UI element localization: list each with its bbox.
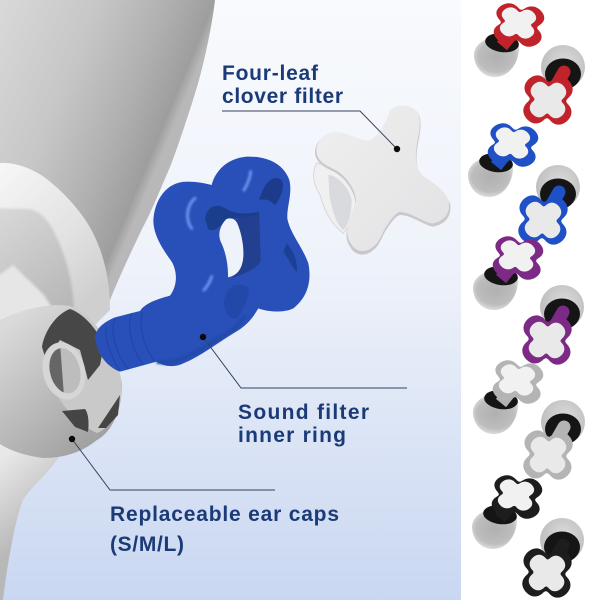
back face <box>314 163 367 233</box>
leader dot <box>200 334 206 340</box>
white four-leaf clover filter <box>314 105 450 255</box>
label: sound filter inner ring <box>200 334 407 447</box>
bottom pocket <box>223 285 249 319</box>
purple earplug A <box>473 225 558 310</box>
dark pocket top right <box>259 178 283 205</box>
cap dark interior <box>42 309 104 380</box>
opening through ring <box>219 218 243 277</box>
black earplug A <box>472 464 557 549</box>
inner ear fold <box>0 265 60 340</box>
inner tube <box>42 342 86 400</box>
sound filter inner ring (blue) <box>95 157 310 372</box>
lower dark blobs <box>62 395 120 432</box>
leader dot <box>394 146 400 152</box>
dark pocket upper-left <box>205 206 259 230</box>
black earplug B <box>507 518 587 600</box>
front edge <box>315 106 450 255</box>
red earplug B <box>508 45 588 140</box>
cheek below ear <box>0 440 60 600</box>
cap body <box>0 305 122 458</box>
size note: (S/M/L) <box>110 533 184 556</box>
blue earplug B <box>503 165 583 260</box>
dark pocket right lobe <box>283 243 297 272</box>
cap opening <box>42 308 122 433</box>
replaceable ear cap <box>0 305 122 458</box>
heading: Four-leaf <box>222 62 319 85</box>
surface highlights <box>188 172 251 290</box>
outer ear <box>0 163 110 340</box>
lower shadow <box>157 315 245 362</box>
leader line <box>203 337 407 388</box>
grey earplug A <box>473 349 558 434</box>
illustration: head and ear <box>0 0 215 600</box>
main panel background <box>0 0 461 600</box>
head <box>0 0 215 320</box>
purple earplug B <box>507 285 587 380</box>
label: replaceable ear caps <box>69 436 339 556</box>
stem ridges <box>106 312 155 371</box>
back shade <box>328 175 352 230</box>
heading line 2: clover filter <box>222 85 343 108</box>
heading: Sound filter <box>238 401 369 424</box>
leader line <box>222 111 397 149</box>
heading: Replaceable ear caps <box>110 503 339 526</box>
leader dot <box>69 436 75 442</box>
dark pocket right of hole <box>232 213 261 278</box>
inner ear hollow <box>0 208 74 340</box>
filter body <box>95 157 310 372</box>
red earplug A <box>474 0 559 77</box>
heading line 2: inner ring <box>238 424 346 447</box>
blue earplug A <box>468 112 553 197</box>
grey earplug B <box>508 400 588 495</box>
colour variants column <box>468 0 588 600</box>
leader line <box>72 439 275 490</box>
label: four-leaf clover filter <box>222 62 400 152</box>
front face <box>316 105 449 251</box>
